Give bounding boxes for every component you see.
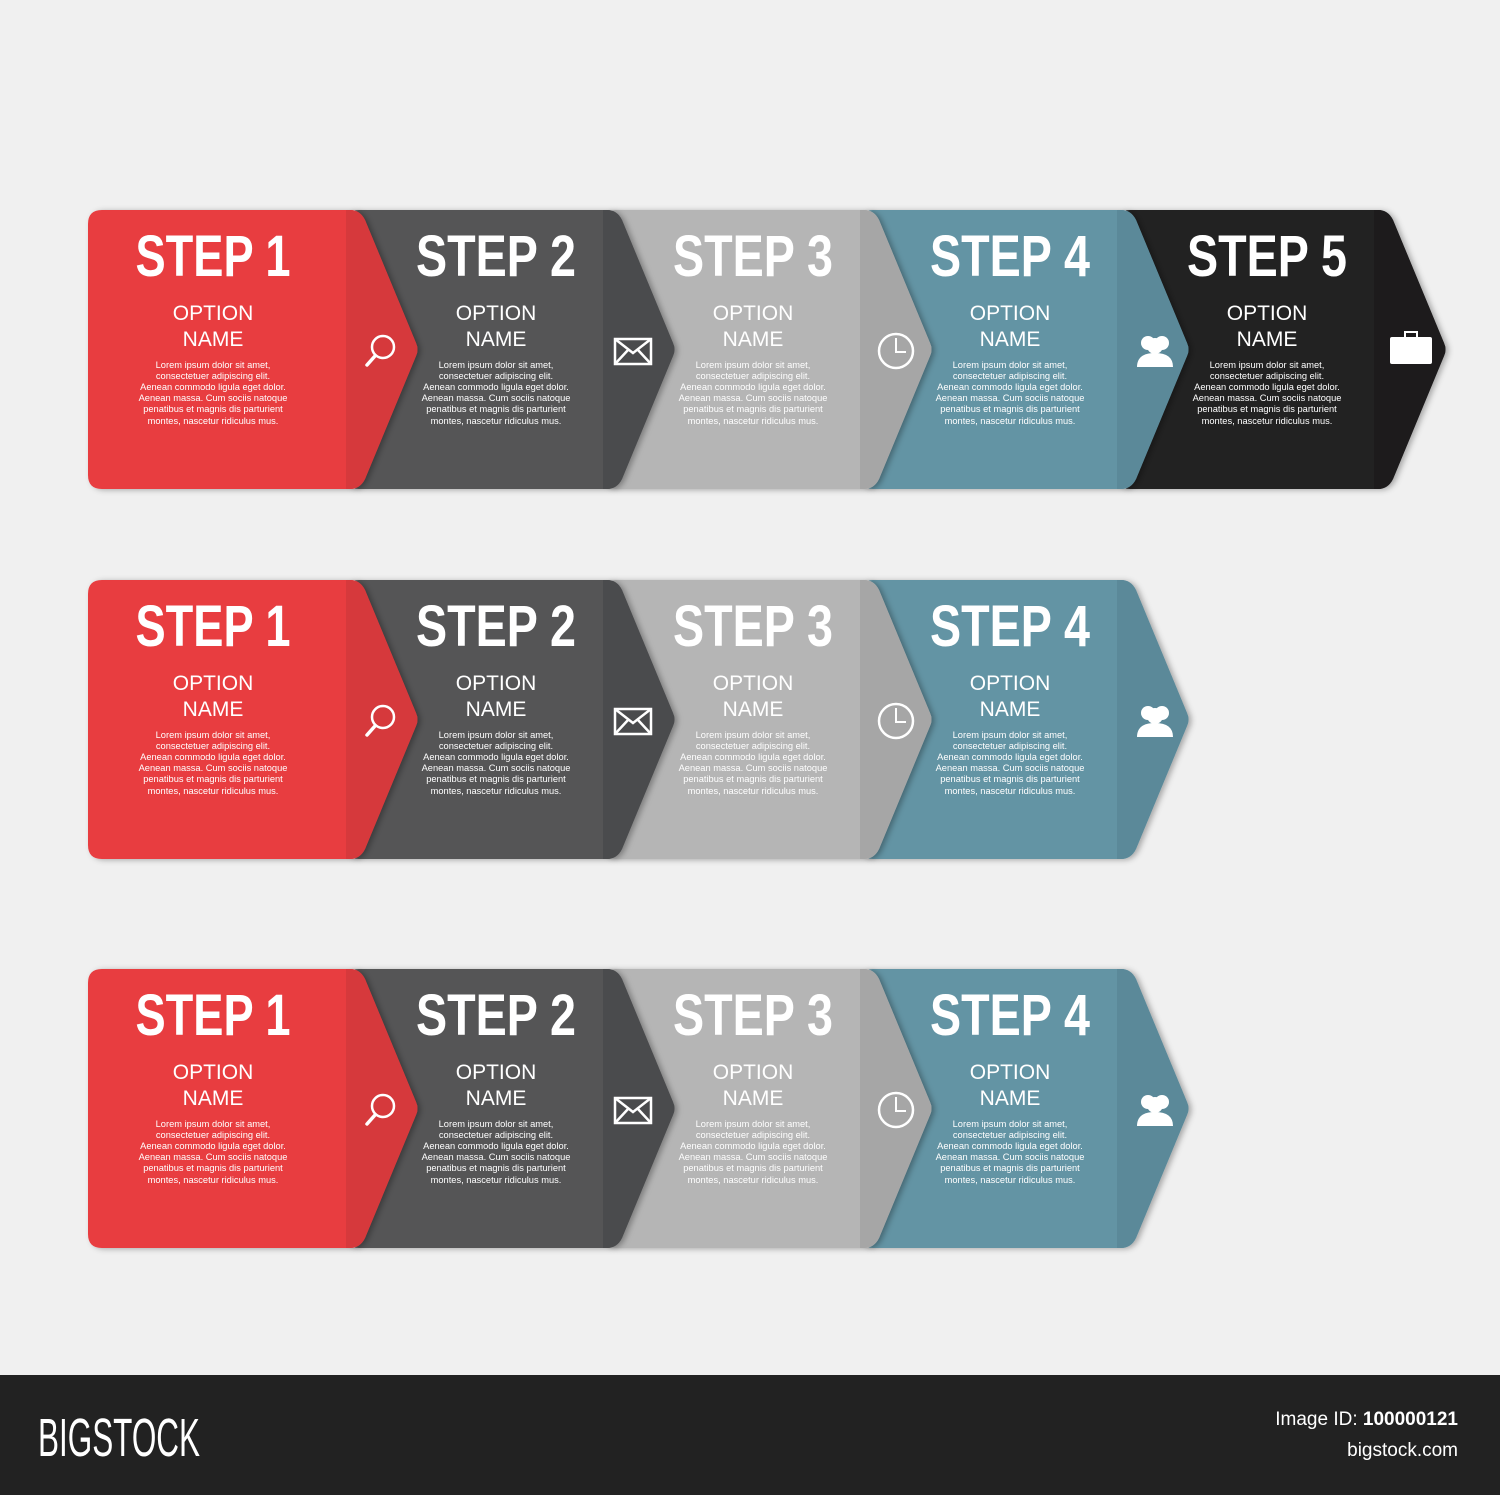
step 3 (602, 969, 932, 1248)
step 1 (88, 580, 418, 859)
step 5 (1116, 210, 1446, 489)
step 3: STEP 3 (673, 224, 833, 289)
step 1: STEP 1 (136, 983, 290, 1048)
step 2: STEP 2 (416, 983, 576, 1048)
step 4: STEP 4 (930, 594, 1090, 659)
step 4 (859, 210, 1188, 489)
step 2: STEP 2 (416, 224, 576, 289)
step 1: STEP 1 (136, 594, 290, 659)
step 3 (602, 210, 932, 489)
row 3: four-step arrow process (88, 969, 1188, 1248)
footer site: bigstock.com (1347, 1440, 1458, 1461)
row 1: five-step arrow process (88, 210, 1446, 489)
step 4 (859, 969, 1188, 1248)
step 4: STEP 4 (930, 224, 1090, 289)
step 4: STEP 4 (930, 983, 1090, 1048)
step 2 (345, 210, 674, 489)
step 3: STEP 3 (673, 594, 833, 659)
step 3 (602, 580, 932, 859)
step 2: STEP 2 (416, 594, 576, 659)
step 4 (859, 580, 1188, 859)
step 1 (88, 210, 418, 489)
step 1 (88, 969, 418, 1248)
footer bar (0, 1375, 1500, 1495)
step 1: STEP 1 (136, 224, 290, 289)
footer logo: BIGSTOCK (38, 1408, 200, 1468)
row 2: four-step arrow process (88, 580, 1188, 859)
step 3: STEP 3 (673, 983, 833, 1048)
step 2 (345, 580, 674, 859)
step 5: STEP 5 (1187, 224, 1347, 289)
footer image id: Image ID: 100000121 (1275, 1409, 1458, 1430)
step 2 (345, 969, 674, 1248)
